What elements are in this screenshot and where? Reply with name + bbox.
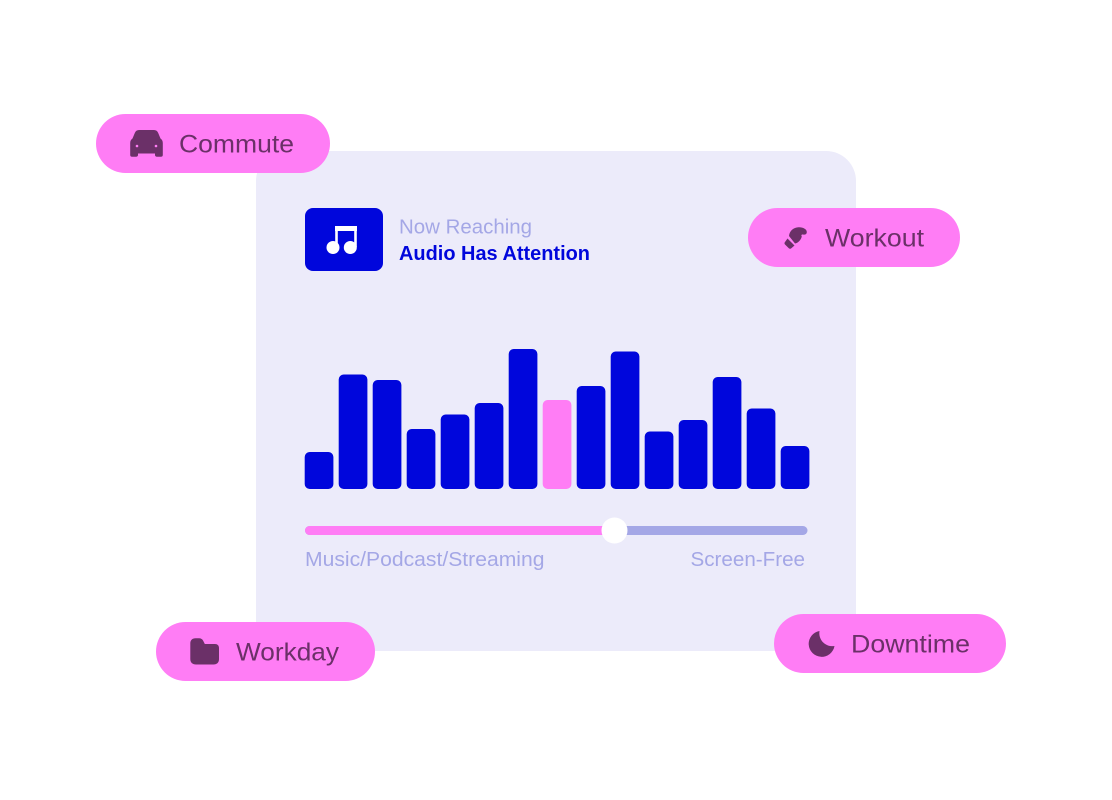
label: workday: Workday — [236, 638, 340, 666]
bar chart — [305, 349, 809, 489]
icon: boxing glove — [784, 227, 807, 249]
pill: workday — [156, 622, 375, 681]
icon: music note tile — [305, 208, 383, 271]
label: commute: Commute — [179, 130, 294, 158]
icon: folder — [190, 638, 219, 664]
heading: audio has attention: Audio Has Attention — [399, 243, 590, 265]
slider label: screen-free: Screen-Free — [690, 549, 805, 571]
text: now reaching: Now Reaching — [399, 216, 532, 238]
label: workout: Workout — [825, 224, 924, 252]
icon: moon — [809, 631, 834, 657]
label: downtime: Downtime — [851, 630, 970, 658]
panel: audio card — [256, 151, 856, 651]
pill: workout — [748, 208, 960, 267]
slider — [305, 518, 808, 544]
icon: car — [130, 130, 163, 157]
pill: commute — [96, 114, 330, 173]
slider label: music podcast streaming: Music/Podcast/Streaming — [305, 549, 544, 571]
pill: downtime — [774, 614, 1006, 673]
